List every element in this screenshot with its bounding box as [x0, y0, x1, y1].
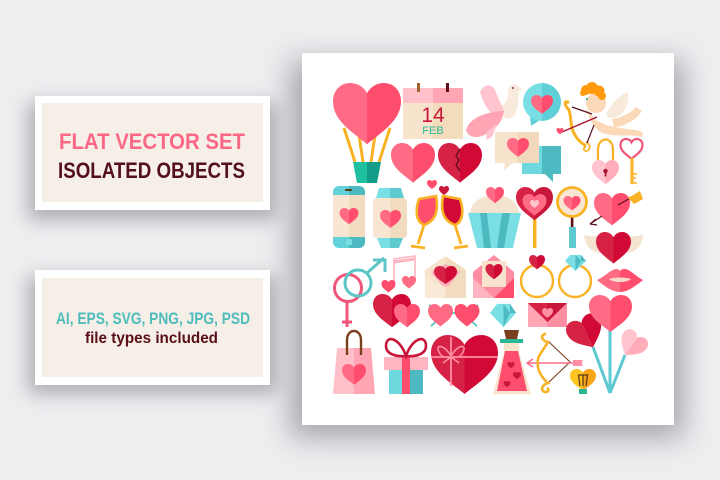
icon: love potion flask: [493, 330, 531, 394]
icon: bouquet of heart balloons: [563, 295, 651, 393]
icon: heart padlock: [592, 140, 619, 184]
heading: isolated objects: ISOLATED OBJECTS: [58, 158, 245, 183]
icon: heart key: [620, 139, 642, 184]
icon: broken heart: [438, 143, 482, 183]
icon: ring with diamond: [559, 255, 591, 297]
heading: flat vector set: FLAT VECTOR SET: [59, 129, 246, 154]
icon: phone: [333, 186, 365, 248]
panel: file types card: [35, 270, 270, 385]
icon: ring with heart: [521, 255, 553, 297]
icon: champagne glasses: [411, 180, 468, 248]
icon: speech bubble with heart: [523, 83, 561, 126]
icon: heart with arrow: [590, 191, 643, 225]
icon: chocolate heart box: [431, 335, 498, 394]
icon: dove: [466, 84, 523, 140]
icon: music notes with hearts: [382, 256, 416, 293]
icon: heart light bulb: [570, 369, 596, 394]
icon: calendar 14 feb: [403, 83, 463, 139]
icon: gender symbols: [334, 258, 385, 327]
icon: pink heart: [391, 143, 435, 183]
icon: heart sunglasses: [428, 304, 480, 326]
icon: cupcake with heart: [468, 187, 521, 248]
text: file types included: file types included: [85, 330, 218, 347]
icon: heart lollipop: [516, 187, 553, 248]
icon: diamond: [490, 304, 516, 327]
icon: sealed envelope: [528, 303, 567, 327]
panel: icon collection: [302, 53, 674, 425]
icon: winged heart: [584, 232, 643, 264]
icon: heart hot air balloon: [333, 83, 401, 183]
panel: flat vector set heading card: [35, 96, 270, 210]
icon: open pink envelope with letter: [473, 255, 514, 298]
icon: magnifier with heart: [558, 188, 586, 248]
icon: gift box: [384, 339, 428, 394]
icon: shopping bag: [333, 331, 375, 394]
icon: calendar 14 feb: FEB: [422, 125, 444, 137]
icon: cupid with bow: [556, 82, 643, 151]
icon: calendar 14 feb: 14: [421, 104, 445, 127]
icon: chat bubbles with heart: [495, 132, 561, 182]
text: file formats: AI, EPS, SVG, PNG, JPG, PSD: [56, 309, 250, 328]
icon: bow and arrow: [527, 334, 583, 392]
icon: smart watch: [373, 188, 407, 248]
icon: pair of hearts: [373, 294, 420, 327]
icon: lips: [597, 269, 643, 292]
icon: love letter envelope: [425, 256, 466, 298]
